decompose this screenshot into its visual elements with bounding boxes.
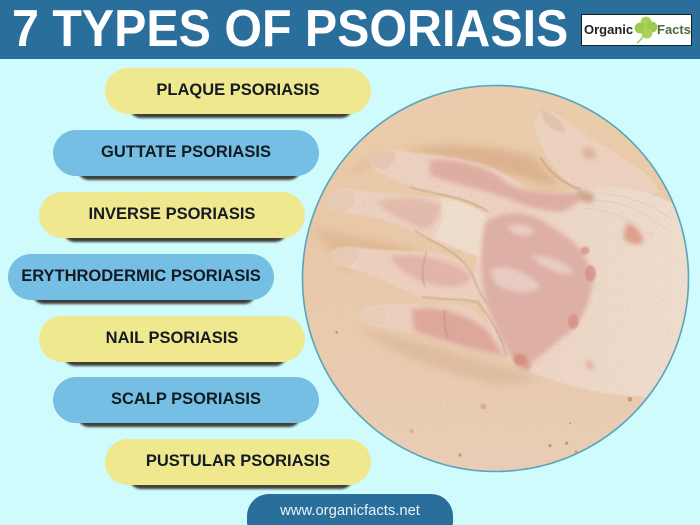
skin shadows xyxy=(313,145,560,385)
pill: nail: NAIL PSORIASIS xyxy=(106,329,238,347)
pill: pustular: PUSTULAR PSORIASIS xyxy=(146,452,330,470)
pill: guttate xyxy=(53,130,319,176)
thumb xyxy=(324,110,700,397)
footer pill xyxy=(247,494,453,525)
little finger xyxy=(370,304,501,354)
pill: erythrodermic: ERYTHRODERMIC PSORIASIS xyxy=(21,267,261,285)
header band xyxy=(0,0,700,59)
pill: erythrodermic xyxy=(8,254,274,300)
pill: nail xyxy=(39,316,305,362)
title: 7 TYPES OF PSORIASIS xyxy=(12,0,568,58)
pink psoriasis patches xyxy=(377,147,643,370)
circular photo: hand with psoriasis xyxy=(247,84,690,525)
pill: scalp: SCALP PSORIASIS xyxy=(111,390,261,408)
pill: pustular xyxy=(105,439,371,485)
middle finger xyxy=(332,189,476,257)
logo text: facts: Facts xyxy=(657,22,691,37)
logo text: organic: Organic xyxy=(584,22,633,37)
pill: guttate: GUTTATE PSORIASIS xyxy=(101,143,271,161)
hand wrinkles xyxy=(587,193,673,237)
ring finger xyxy=(328,247,482,302)
bottom skin spots xyxy=(335,331,632,457)
hand body xyxy=(473,187,700,397)
index finger xyxy=(371,150,532,208)
pill: inverse: INVERSE PSORIASIS xyxy=(89,205,255,223)
pill: scalp xyxy=(53,377,319,423)
footer pill: www.organicfacts.net xyxy=(280,503,420,519)
pill: inverse xyxy=(39,192,305,238)
red edge spots xyxy=(513,247,596,365)
pill: plaque: PLAQUE PSORIASIS xyxy=(156,81,320,99)
icon: clover xyxy=(634,16,658,44)
logo xyxy=(581,14,692,46)
pill: plaque xyxy=(105,68,371,114)
creases xyxy=(410,157,580,357)
pale scales xyxy=(490,224,575,293)
